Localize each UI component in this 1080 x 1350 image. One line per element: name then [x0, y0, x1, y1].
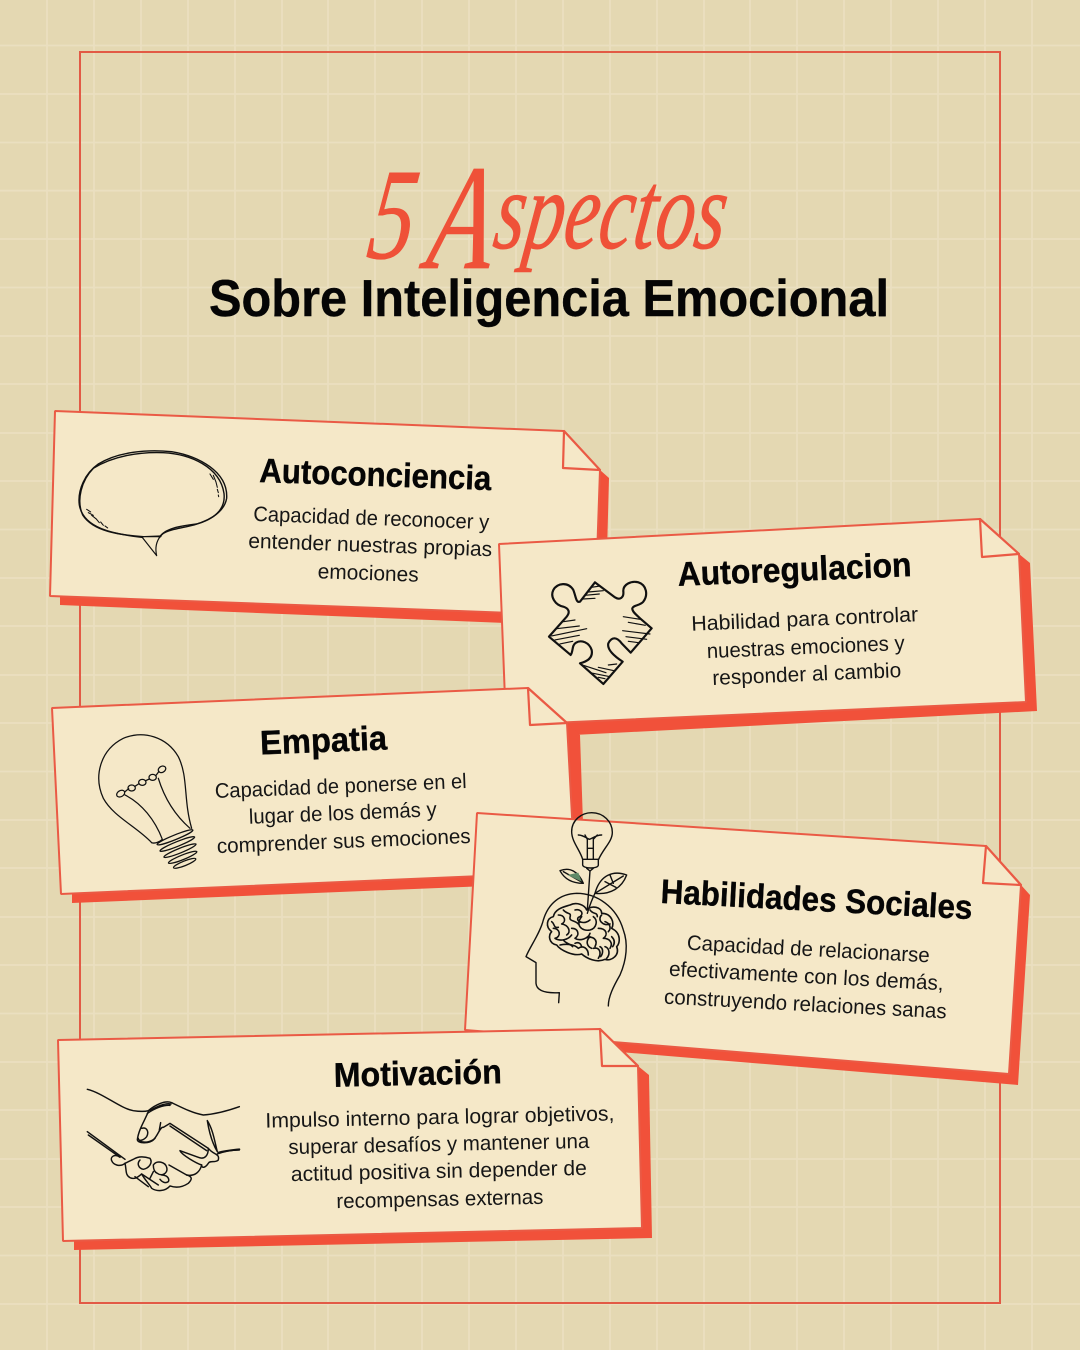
description: lugar de los demás y — [248, 798, 438, 829]
icon: handshake — [87, 1089, 239, 1191]
heading: Empatia — [259, 719, 389, 763]
description: Capacidad de reconocer y — [253, 503, 490, 534]
heading: Autoregulacion — [677, 546, 912, 594]
panel: Habilidades Sociales — [465, 813, 1030, 1085]
description: construyendo relaciones sanas — [663, 986, 947, 1023]
description: Impulso interno para lograr objetivos, — [265, 1102, 615, 1133]
heading: Motivación — [333, 1053, 502, 1095]
panel: Motivación — [58, 1029, 652, 1250]
description: actitud positiva sin depender de — [291, 1157, 587, 1186]
description: recompensas externas — [336, 1186, 544, 1213]
icon: head with brain, plant and bulb — [526, 813, 627, 1006]
description: nuestras emociones y — [706, 632, 906, 663]
description: Capacidad de relacionarse — [686, 932, 930, 967]
title: 5 Aspectos: 5 — [361, 143, 427, 287]
description — [248, 503, 493, 587]
description: emociones — [317, 560, 419, 587]
panel: Empatia — [52, 688, 585, 903]
panel: Autoconciencia — [50, 411, 609, 627]
panel: Autoregulacion — [499, 519, 1037, 738]
description: Habilidad para controlar — [691, 603, 919, 636]
description: responder al cambio — [712, 659, 902, 690]
description: comprender sus emociones — [216, 825, 471, 858]
description — [663, 932, 947, 1023]
title: 5 Aspectos: A — [413, 136, 508, 301]
description: Capacidad de ponerse en el — [214, 770, 467, 803]
description — [265, 1102, 615, 1213]
icon: puzzle piece — [549, 582, 652, 684]
title: 5 Aspectos: spectos — [488, 149, 736, 273]
heading: Autoconciencia — [259, 452, 493, 498]
description — [691, 603, 919, 690]
icon: light bulb — [99, 735, 198, 870]
description — [214, 770, 471, 858]
description: superar desafíos y mantener una — [288, 1130, 590, 1159]
description: entender nuestras propias — [248, 530, 493, 561]
page frame — [80, 52, 1000, 1303]
title: Sobre Inteligencia Emocional: Sobre Inteligencia Emocional — [209, 270, 889, 328]
description: efectivamente con los demás, — [668, 958, 944, 995]
heading: Habilidades Sociales — [660, 873, 973, 927]
icon: speech bubble — [79, 451, 227, 556]
